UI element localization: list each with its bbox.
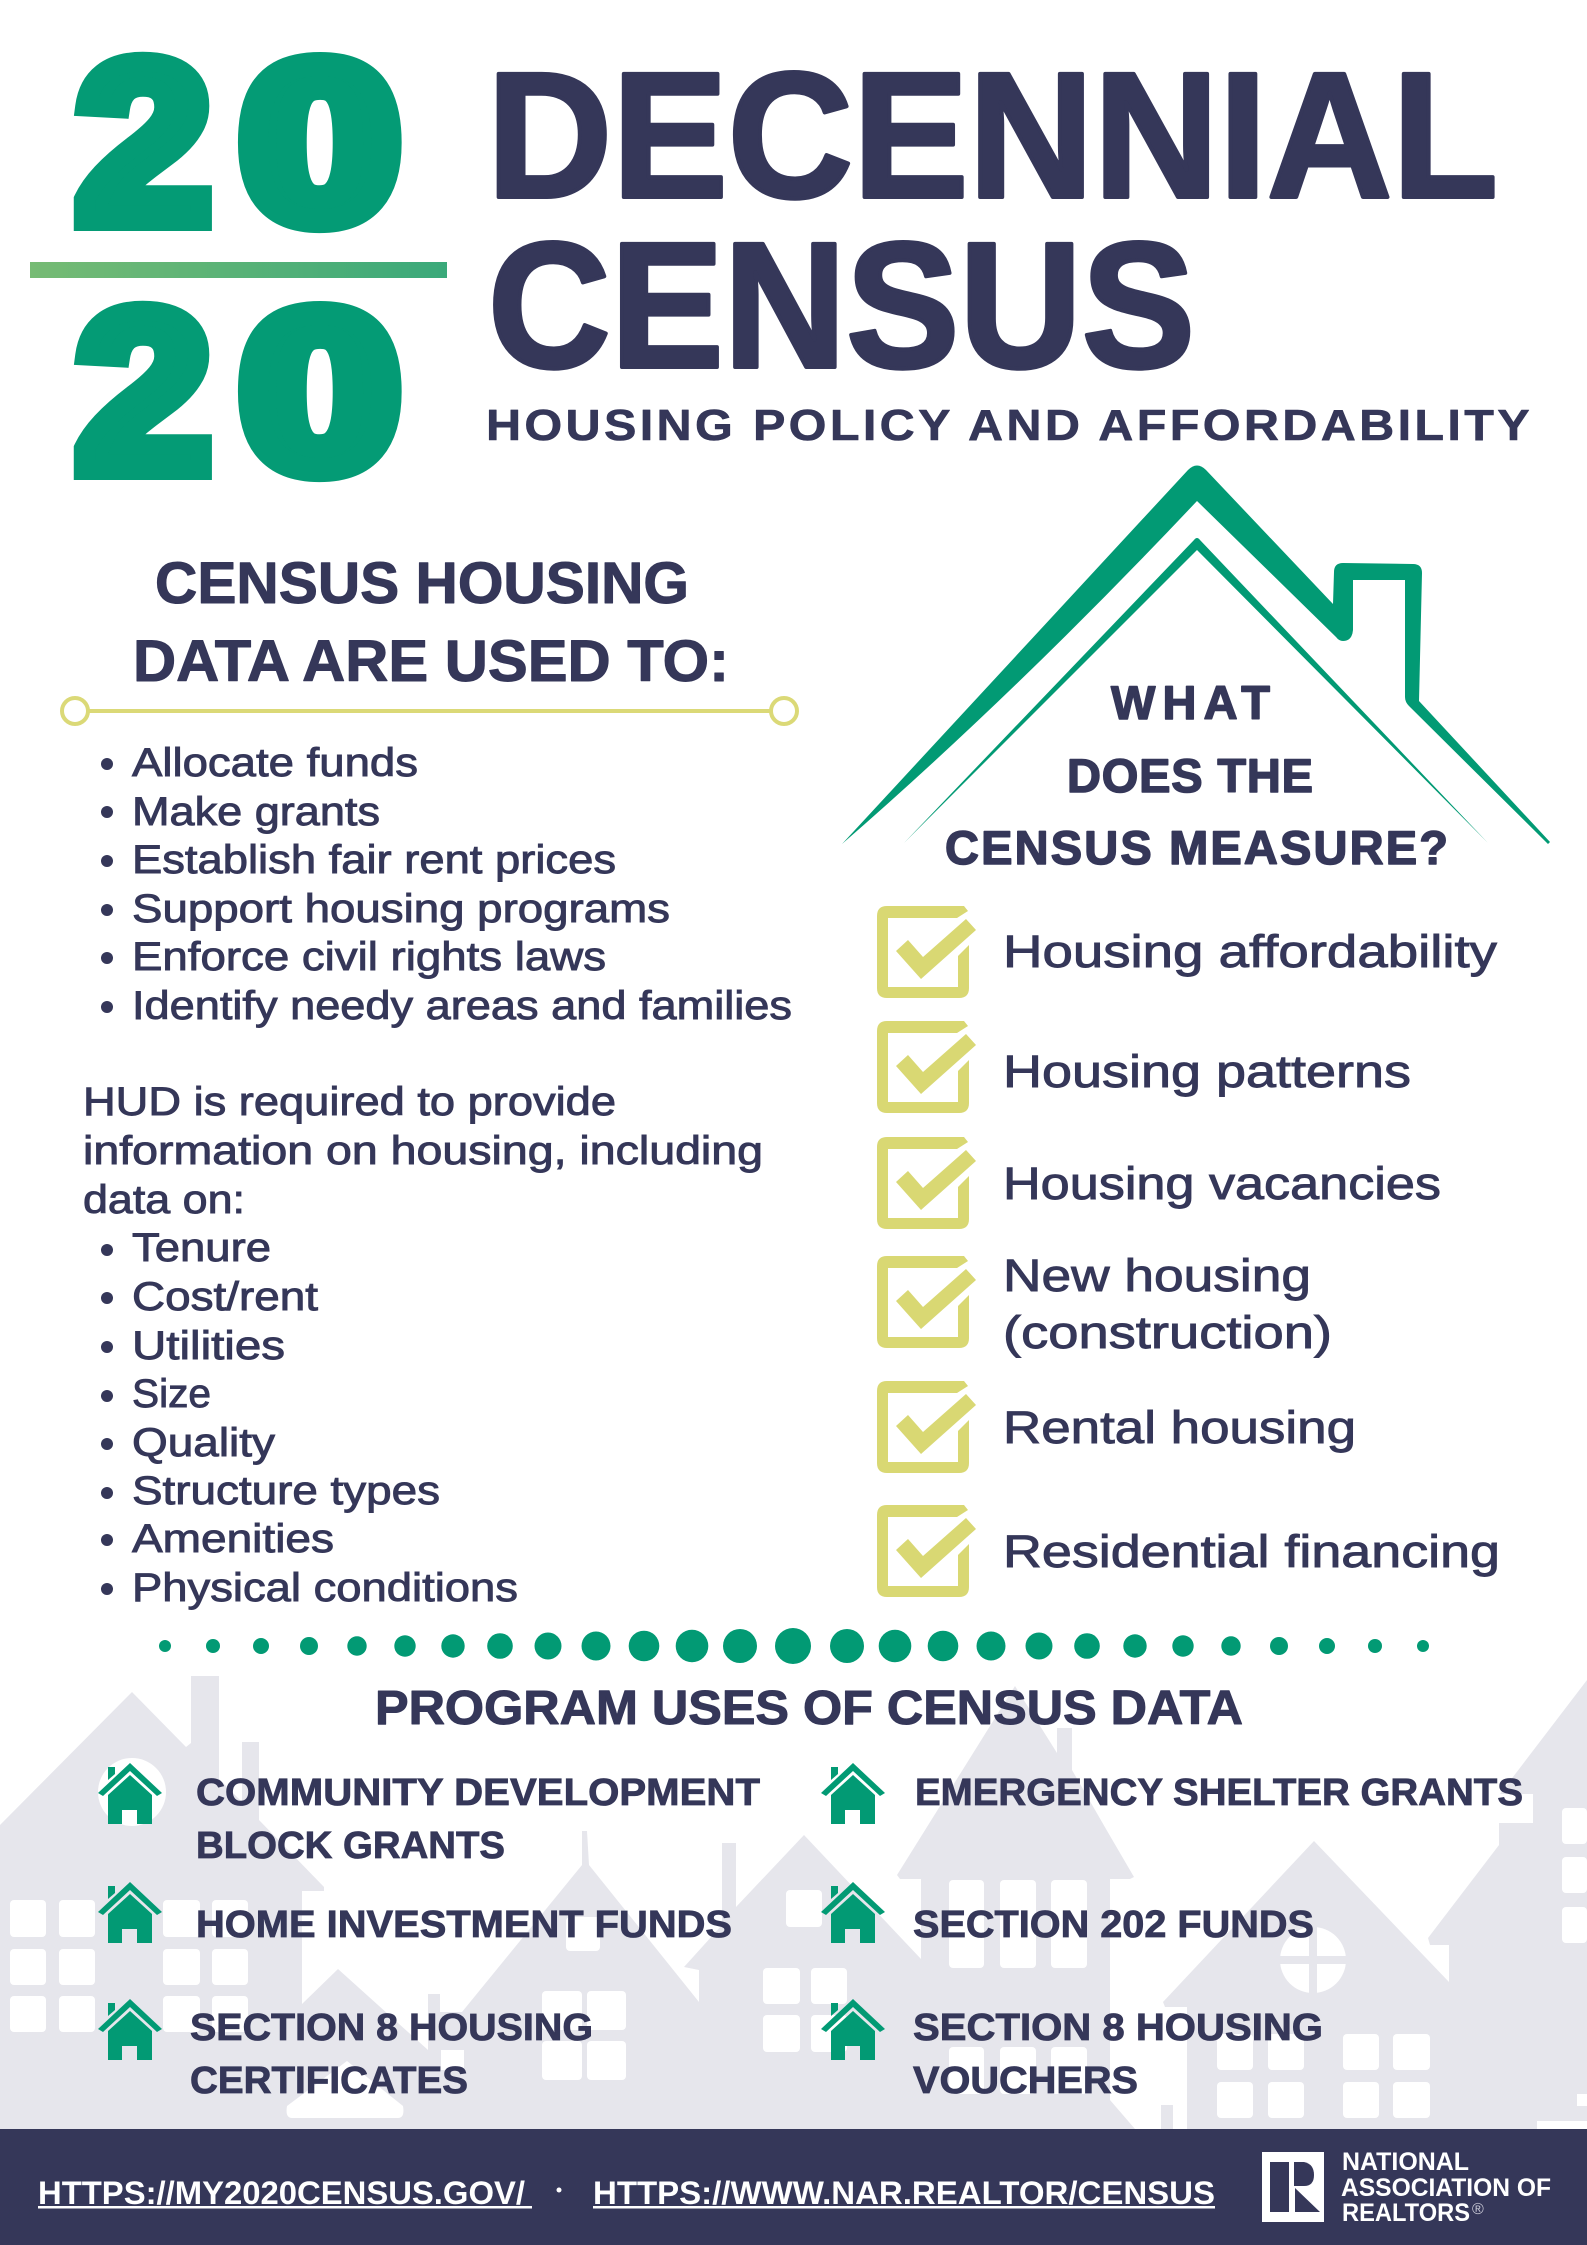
checklist item: new housing: New housing <box>1003 1250 1311 1301</box>
divider with end circles <box>62 698 797 724</box>
heading in roof: DOES THE <box>1067 749 1313 802</box>
title line: census: CENSUS <box>488 205 1195 405</box>
title line: decennial: DECENNIAL <box>487 35 1498 235</box>
bullet list: HUD data: Structure types <box>132 1469 440 1513</box>
paragraph: HUD requirement: information on housing, including <box>83 1129 763 1173</box>
background: house silhouettes <box>0 1676 1587 2129</box>
panel: census housing data uses <box>62 551 797 1610</box>
title <box>486 35 1533 450</box>
panel heading line two: DATA ARE USED TO: <box>133 629 729 694</box>
panel: what does the census measure <box>842 466 1550 1597</box>
bullet list: HUD data: Size <box>132 1372 211 1416</box>
bullet list: HUD data: Tenure <box>132 1226 271 1270</box>
bullet list: uses: Identify needy areas and families <box>132 984 792 1028</box>
panel heading: CENSUS HOUSING <box>155 551 689 616</box>
program: community development block grants <box>98 1763 760 1867</box>
checklist item: residential financing: Residential financing <box>1003 1526 1500 1577</box>
numeral: top 20: 2 <box>76 16 211 270</box>
checklist item: residential financing <box>877 1505 1500 1597</box>
bullet list: uses: Establish fair rent prices <box>132 838 616 882</box>
bullet list: HUD data: Cost/rent <box>132 1275 318 1319</box>
checklist item: rental housing: Rental housing <box>1003 1402 1356 1453</box>
gradient divider bar <box>30 262 447 278</box>
program: section 202 funds <box>821 1882 1314 1946</box>
heading in roof: WHAT <box>1111 676 1270 729</box>
logo wordmark: ® <box>1472 2201 1484 2218</box>
program: section 8 housing vouchers: VOUCHERS <box>913 2060 1138 2102</box>
dotted divider <box>159 1628 1429 1664</box>
heading in roof <box>945 676 1448 874</box>
bullet list: uses <box>101 741 792 1028</box>
numeral: bottom 20: 2 <box>76 265 211 519</box>
program: section 8 housing vouchers: SECTION 8 HOUSING <box>913 2007 1323 2049</box>
bullet list: HUD data: Amenities <box>132 1517 334 1561</box>
bullet list: uses: Allocate funds <box>132 741 418 785</box>
numeral: bottom 20: 0 <box>242 268 398 516</box>
checklist item: housing vacancies <box>877 1137 1441 1229</box>
panel heading: PROGRAM USES OF CENSUS DATA <box>375 1682 1243 1735</box>
separator dot <box>556 2188 562 2192</box>
paragraph: HUD requirement <box>83 1080 763 1222</box>
footer band <box>0 2129 1587 2245</box>
logo wordmark: REALTORS <box>1342 2199 1470 2227</box>
checklist item: housing patterns: Housing patterns <box>1003 1046 1411 1097</box>
numeral: bottom 20 <box>76 265 398 519</box>
logo: realtor R block <box>1262 2152 1324 2222</box>
checklist item: housing affordability: Housing affordability <box>1003 926 1498 977</box>
program: section 8 housing certificates: CERTIFICATES <box>190 2060 468 2102</box>
program: section 8 housing certificates: SECTION 8 HOUSING <box>190 2007 593 2049</box>
checklist item: housing patterns <box>877 1021 1411 1113</box>
numeral: top 20: 0 <box>242 19 398 267</box>
program: home investment funds <box>98 1882 732 1946</box>
program: community development block grants: COMMUNITY DEVELOPMENT <box>196 1772 760 1814</box>
numeral: top 20 <box>76 16 398 270</box>
program: community development block grants: BLOCK GRANTS <box>196 1825 505 1867</box>
program: section 8 housing vouchers <box>821 1999 1323 2102</box>
program: section 202 funds: SECTION 202 FUNDS <box>913 1904 1314 1946</box>
logo wordmark: NATIONAL <box>1342 2148 1469 2176</box>
icon: roof with chimney <box>842 466 1550 844</box>
checklist item: housing affordability <box>877 906 1498 998</box>
paragraph: HUD requirement: data on: <box>83 1178 245 1222</box>
bullet list: HUD data: Physical conditions <box>132 1566 518 1610</box>
checklist item: new housing: (construction) <box>1003 1307 1332 1358</box>
logo numerals: 20 over 20 <box>30 16 447 519</box>
checklist item: new housing <box>877 1250 1332 1358</box>
subtitle: HOUSING POLICY AND AFFORDABILITY <box>486 401 1533 450</box>
program: emergency shelter grants <box>821 1763 1523 1824</box>
bullet list: HUD data <box>101 1226 518 1610</box>
link: nar.realtor: HTTPS://WWW.NAR.REALTOR/CENSUS <box>593 2175 1215 2211</box>
bullet list: HUD data: Utilities <box>132 1324 285 1368</box>
program: home investment funds: HOME INVESTMENT FUNDS <box>196 1904 732 1946</box>
checklist item: rental housing <box>877 1381 1356 1473</box>
bullet list: uses: Enforce civil rights laws <box>132 935 606 979</box>
link: my2020census: HTTPS://MY2020CENSUS.GOV/ <box>38 2175 525 2211</box>
bullet list: uses: Make grants <box>132 790 380 834</box>
program: section 8 housing certificates <box>98 1999 593 2102</box>
paragraph: HUD requirement: HUD is required to provide <box>83 1080 616 1124</box>
heading in roof: CENSUS MEASURE? <box>945 821 1448 874</box>
bullet list: uses: Support housing programs <box>132 887 670 931</box>
bullet list: HUD data: Quality <box>132 1421 275 1465</box>
logo wordmark: ASSOCIATION OF <box>1341 2174 1551 2202</box>
logo wordmark <box>1341 2148 1551 2227</box>
panel: program uses of census data <box>98 1682 1523 2102</box>
program: emergency shelter grants: EMERGENCY SHELTER GRANTS <box>915 1772 1523 1814</box>
checklist item: housing vacancies: Housing vacancies <box>1003 1158 1441 1209</box>
